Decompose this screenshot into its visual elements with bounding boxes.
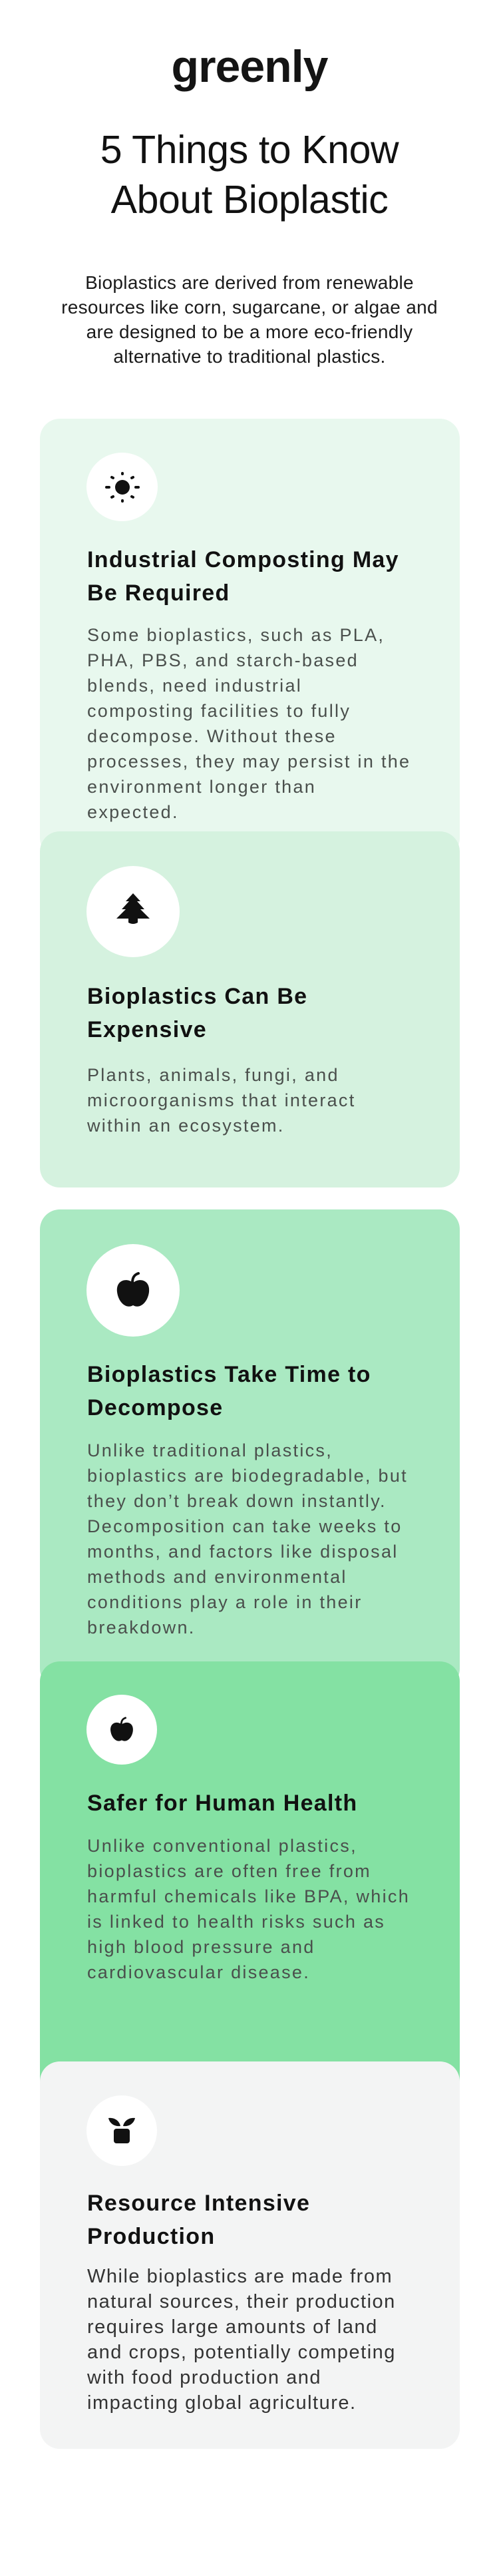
heading: expensive: Bioplastics Can Be — [87, 984, 307, 1009]
text: resource intensive — [87, 2266, 396, 2414]
text: health: Unlike conventional plastics, — [87, 1836, 357, 1856]
heading: expensive: Expensive — [87, 1017, 207, 1042]
text: health: high blood pressure and — [87, 1937, 315, 1957]
text: decompose: bioplastics are biodegradable, but — [87, 1466, 408, 1486]
text: expensive: Plants, animals, fungi, and — [87, 1065, 339, 1085]
intro text: Bioplastics are derived from renewable — [85, 272, 414, 293]
icon: apple — [86, 1244, 180, 1337]
title: About Bioplastic — [111, 178, 388, 222]
text: resource intensive: with food production and — [87, 2367, 321, 2388]
text: health: is linked to health risks such as — [87, 1912, 385, 1932]
heading: health: Safer for Human Health — [87, 1791, 357, 1816]
heading: industrial composting — [87, 547, 399, 606]
text: decompose: they don’t break down instantly. — [87, 1491, 387, 1511]
heading: resource intensive: Resource Intensive — [87, 2191, 310, 2216]
icon: tree — [86, 866, 180, 957]
panel: resource intensive — [40, 2061, 460, 2449]
intro text: are designed to be a more eco-friendly — [86, 322, 413, 342]
panel: industrial composting — [40, 419, 460, 858]
text: health: harmful chemicals like BPA, which — [87, 1886, 410, 1906]
panel: decompose — [40, 1209, 460, 1689]
heading: decompose: Bioplastics Take Time to — [87, 1362, 371, 1387]
text: decompose — [87, 1440, 408, 1637]
text: decompose: methods and environmental — [87, 1567, 347, 1587]
text: expensive — [87, 1065, 356, 1136]
heading: resource intensive: Production — [87, 2224, 215, 2249]
text: expensive: microorganisms that interact — [87, 1090, 356, 1110]
text: expensive: within an ecosystem. — [87, 1116, 285, 1136]
text: industrial composting: Some bioplastics, such as PLA, — [87, 625, 385, 645]
text: health: cardiovascular disease. — [87, 1962, 310, 1982]
icon: sun — [86, 453, 158, 521]
text: resource intensive: natural sources, their production — [87, 2291, 396, 2312]
icon: plant pot — [86, 2095, 157, 2166]
heading: industrial composting: Industrial Composting May — [87, 547, 399, 572]
text: resource intensive: While bioplastics are made from — [87, 2266, 393, 2287]
panel: expensive — [40, 831, 460, 1187]
text: industrial composting: blends, need industrial — [87, 676, 302, 696]
text: industrial composting: environment longer than — [87, 777, 316, 797]
heading: expensive — [87, 984, 307, 1042]
text: health: bioplastics are often free from — [87, 1861, 371, 1881]
text: resource intensive: and crops, potentially competing — [87, 2342, 396, 2363]
heading: industrial composting: Be Required — [87, 580, 230, 606]
text: industrial composting: PHA, PBS, and starch-based — [87, 650, 359, 670]
text: resource intensive: requires large amounts of land — [87, 2316, 378, 2338]
text: resource intensive: impacting global agriculture. — [87, 2392, 357, 2414]
text: industrial composting: expected. — [87, 802, 179, 822]
intro text: resources like corn, sugarcane, or algae and — [61, 297, 438, 318]
text: decompose: conditions play a role in their — [87, 1592, 362, 1612]
intro text: alternative to traditional plastics. — [113, 346, 386, 367]
text: decompose: Decomposition can take weeks to — [87, 1516, 403, 1536]
heading: decompose: Decompose — [87, 1395, 223, 1420]
text: decompose: breakdown. — [87, 1617, 196, 1637]
text: industrial composting: processes, they may persist in the — [87, 751, 411, 771]
panel: health — [40, 1661, 460, 2101]
text: industrial composting: composting facilities to fully — [87, 701, 351, 721]
logo: greenly — [172, 41, 327, 92]
heading: resource intensive — [87, 2191, 310, 2249]
title: 5 Things to Know — [100, 128, 399, 172]
text: decompose: Unlike traditional plastics, — [87, 1440, 333, 1460]
intro text — [61, 272, 438, 367]
text: decompose: months, and factors like disposal — [87, 1542, 399, 1562]
icon: small apple — [86, 1695, 157, 1765]
text: industrial composting: decompose. Without these — [87, 726, 337, 746]
heading: decompose — [87, 1362, 371, 1420]
text: industrial composting — [87, 625, 411, 822]
text: health — [87, 1836, 410, 1982]
title — [100, 128, 399, 222]
